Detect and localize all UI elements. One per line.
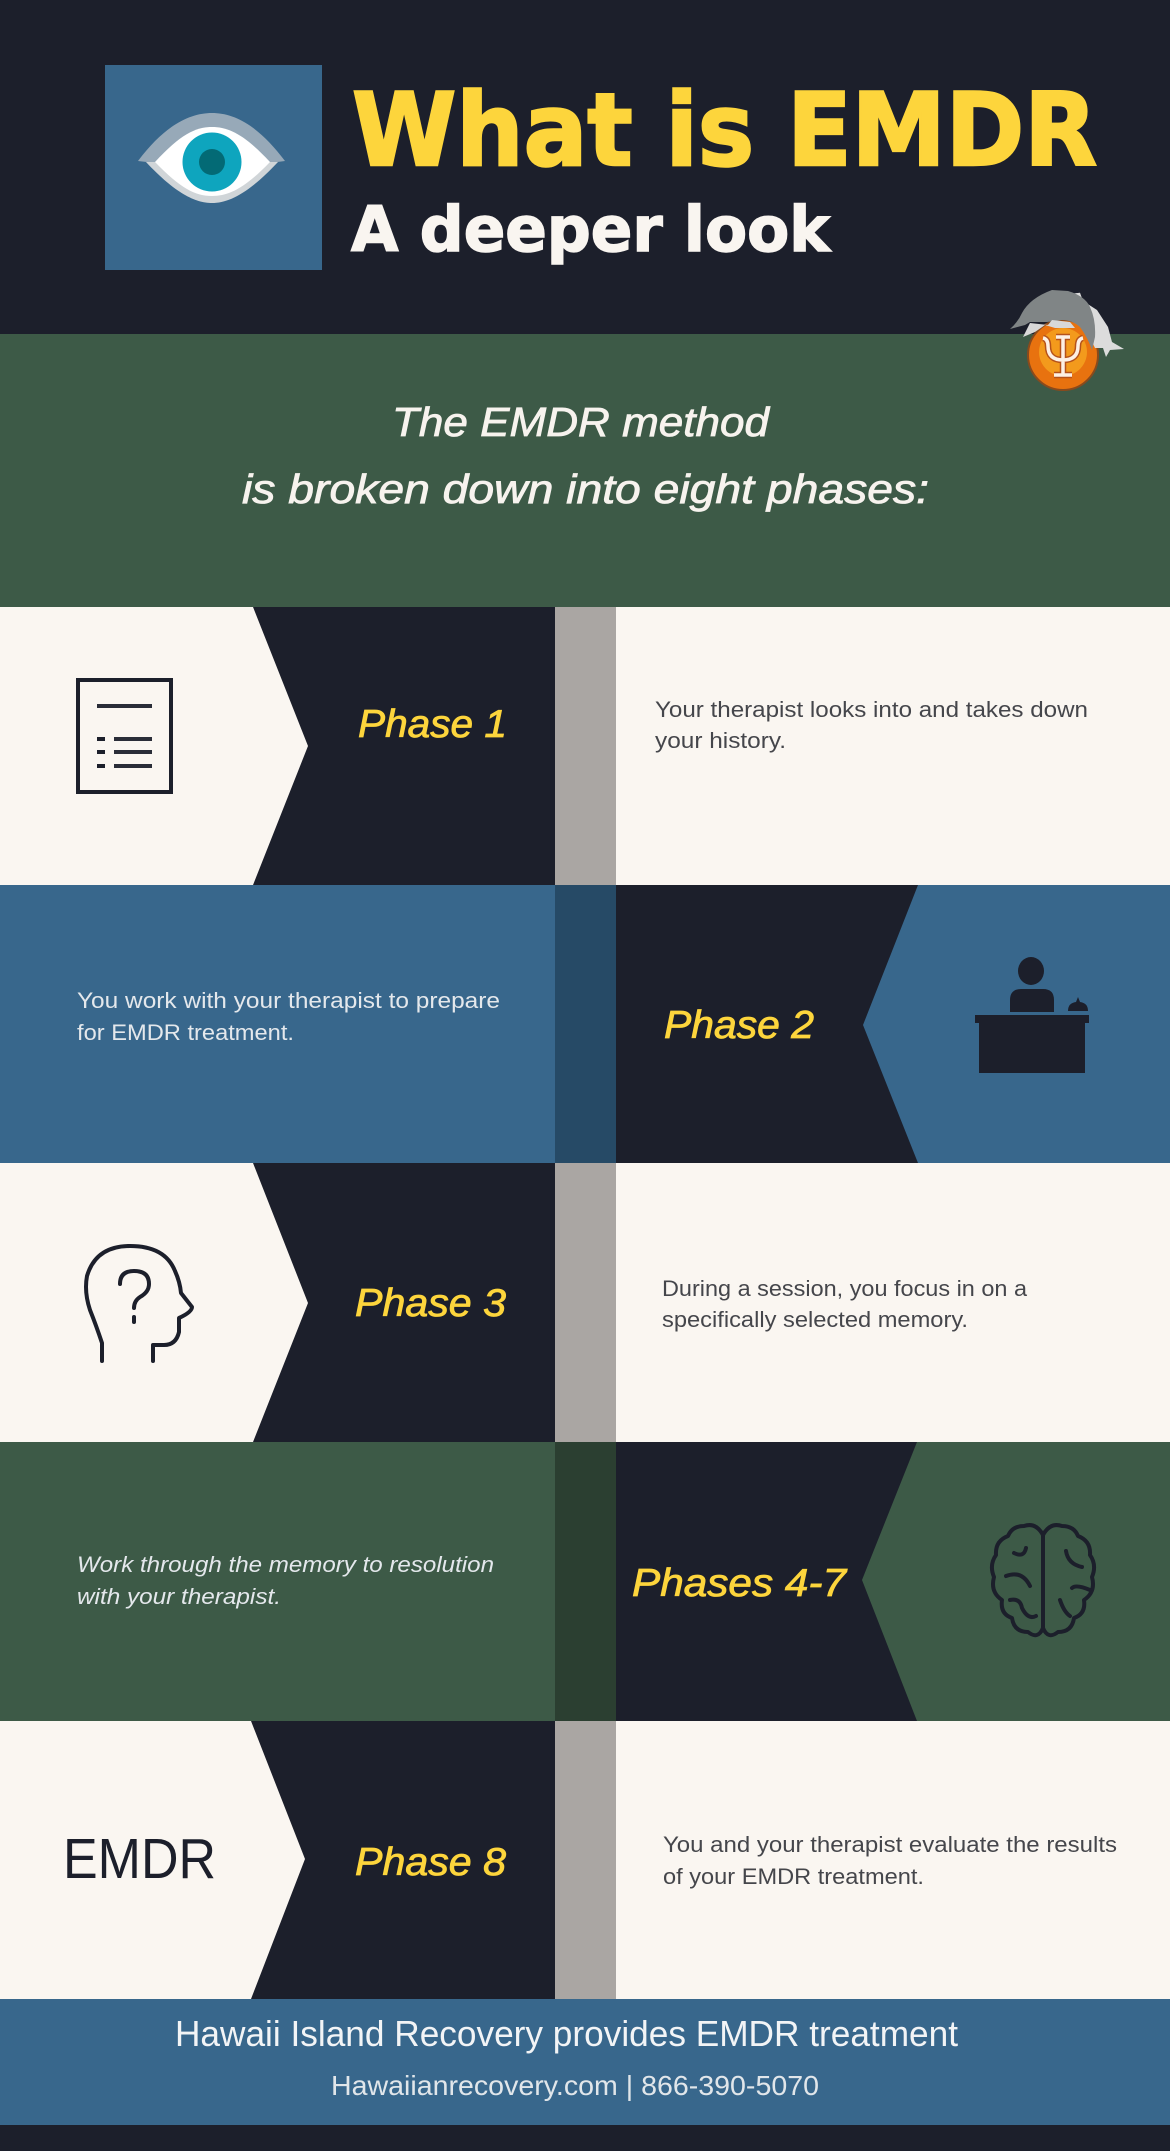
footer heading: Hawaii Island Recovery provides EMDR treatment [175,2013,958,2054]
text: phase 1 description [655,697,1088,753]
text: phase 1 description: Your therapist looks into and takes down [655,697,1088,722]
icon: dolphin and psi logo [1010,290,1124,390]
text: phase 8 description: You and your therapist evaluate the results [663,1832,1117,1857]
text: phase 8 description [663,1832,1117,1889]
panel: phases 4-7 row [0,1442,1170,1721]
text: phase 2 description: You work with your therapist to prepare [77,988,500,1013]
text: phases 4-7 description [77,1552,494,1609]
subtitle: A deeper look [351,193,832,266]
text: phase 1 description: your history. [655,728,786,753]
text: phase 3 description: During a session, you focus in on a [662,1276,1028,1301]
panel: phase 1 row [0,607,1170,885]
footer contact: Hawaiianrecovery.com | 866-390-5070 [331,2070,819,2101]
panel: phase 3 row [0,1163,1170,1442]
icon: eye tile [105,65,322,270]
title: What is EMDR [352,71,1097,189]
text: phase 2 description: for EMDR treatment. [77,1020,294,1045]
panel: intro band [0,334,1170,607]
panel: header [105,65,1097,270]
panel: phase 2 row [0,885,1170,1163]
label: phase 2: Phase 2 [664,1004,814,1047]
text: phase 3 description [662,1276,1028,1332]
label: phase 8: Phase 8 [355,1841,506,1884]
text: phase 2 description [77,988,500,1045]
intro text: The EMDR method [392,399,770,445]
text: phase 3 description: specifically selected memory. [662,1307,968,1332]
intro text: is broken down into eight phases: [242,466,929,512]
label: phase 3: Phase 3 [355,1282,506,1325]
panel: phase 8 row [0,1721,1170,1999]
label: phase 1: Phase 1 [358,703,507,746]
icon: head with question mark [86,1246,192,1361]
icon: brain [992,1525,1094,1635]
icon: document list [78,680,171,792]
text: phases 4-7 description: with your therapist. [77,1584,281,1609]
text: phases 4-7 description: Work through the memory to resolution [77,1552,494,1577]
intro text [242,399,929,512]
icon: EMDR wordmark: EMDR [63,1827,216,1891]
label: phases 4-7: Phases 4-7 [632,1562,847,1605]
panel: footer [0,1999,1170,2125]
icon: person at desk [975,957,1089,1073]
text: phase 8 description: of your EMDR treatment. [663,1864,924,1889]
